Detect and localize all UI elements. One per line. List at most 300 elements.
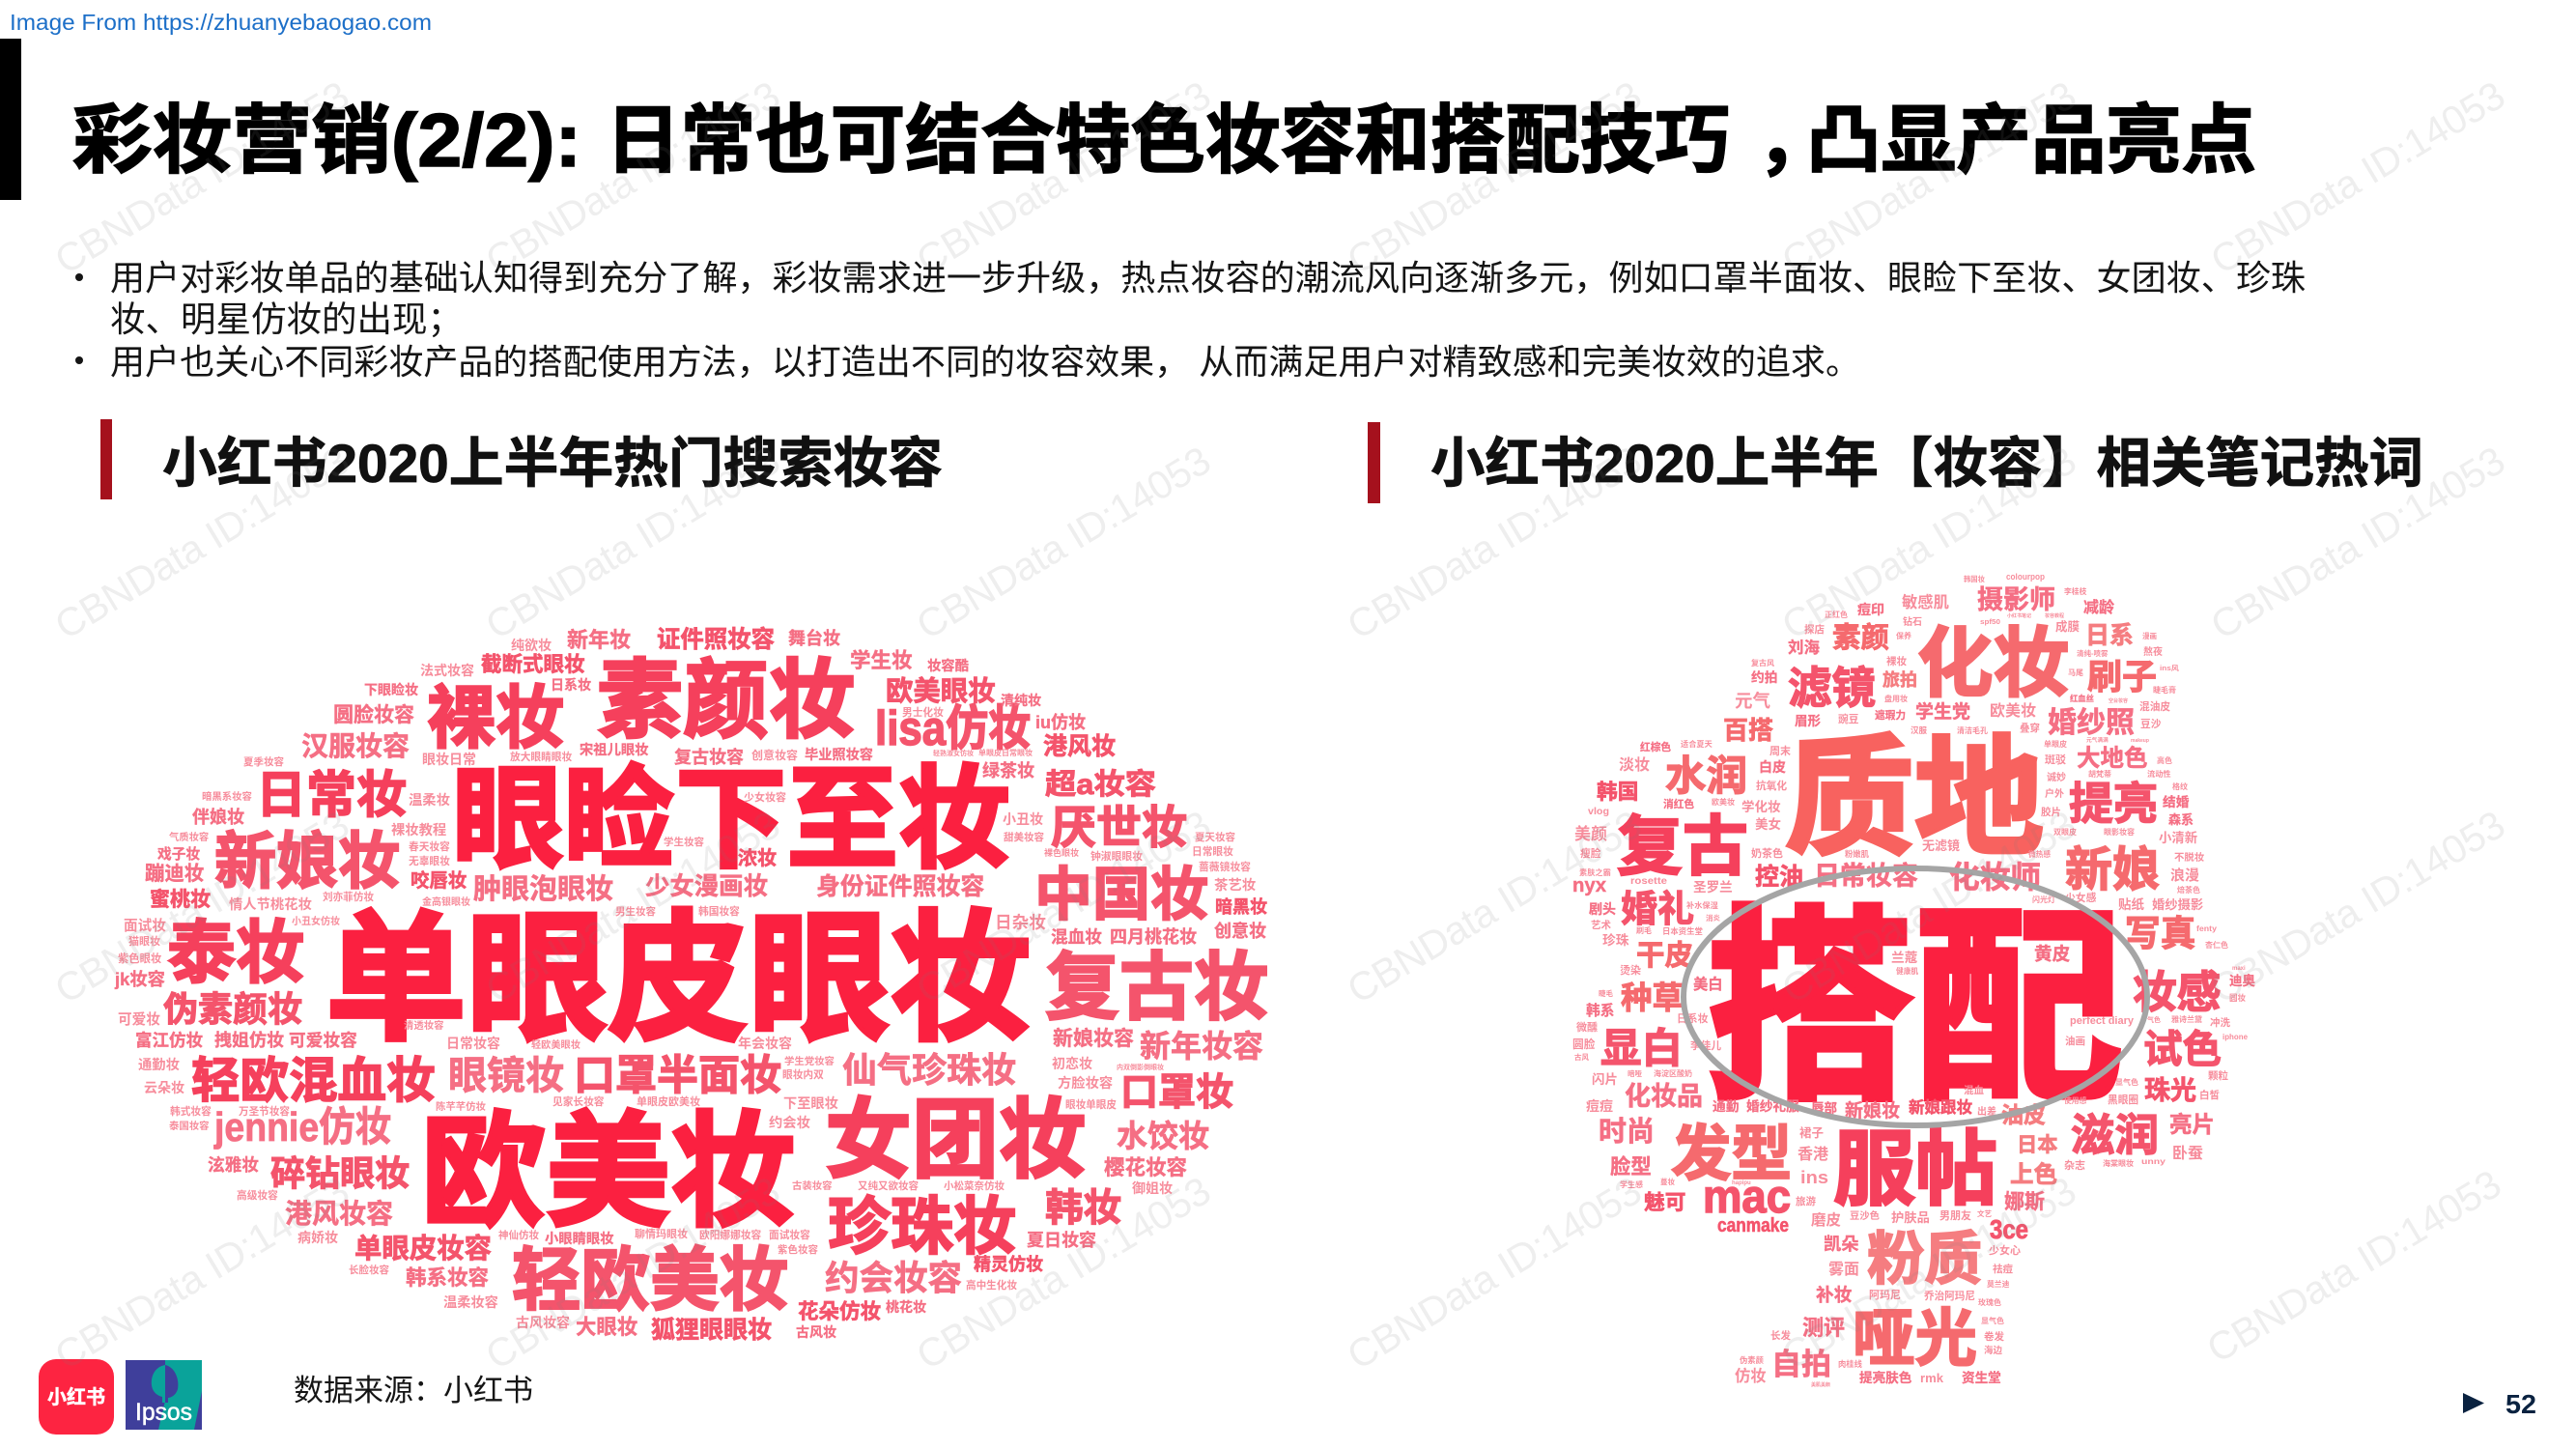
word cloud: makeup related note keywords: 欧美妆	[1990, 701, 2036, 720]
word cloud: hot searched makeup: 富江仿妆	[135, 1031, 203, 1050]
word cloud: hot searched makeup: 男士化妆	[902, 706, 944, 719]
word cloud: makeup related note keywords: 混油皮	[2139, 700, 2170, 713]
data source note: 数据来源：小红书	[294, 1374, 533, 1407]
word cloud: makeup related note keywords: 文艺	[1977, 1208, 1992, 1218]
word cloud: hot searched makeup: 蹦迪妆	[145, 863, 204, 885]
word cloud: makeup related note keywords: 魅可	[1644, 1190, 1685, 1214]
word cloud: makeup related note keywords: 圣罗兰	[1693, 879, 1733, 895]
word cloud: makeup related note keywords: vlog	[1588, 807, 1609, 817]
word cloud: hot searched makeup: 绿茶妆	[982, 760, 1034, 781]
word cloud: makeup related note keywords: 黑眼圈	[2108, 1094, 2138, 1106]
word cloud: hot searched makeup: 新年妆容	[1140, 1029, 1263, 1064]
word cloud: hot searched makeup: 韩系妆容	[406, 1265, 489, 1290]
word cloud: hot searched makeup: 轻欧美眼妆	[531, 1038, 580, 1051]
word cloud: hot searched makeup: 古风妆容	[516, 1315, 570, 1330]
word cloud: hot searched makeup: 轻熟淑女仿妆	[933, 749, 974, 757]
watermarks: CBNData ID:14053	[1340, 72, 1649, 283]
watermarks: CBNData ID:14053	[1774, 1168, 2083, 1378]
word cloud: makeup related note keywords: 海边	[1984, 1345, 2003, 1356]
word cloud: hot searched makeup: 水饺妆	[1117, 1119, 1209, 1153]
word cloud: hot searched makeup: 无辜眼妆	[409, 855, 450, 867]
word cloud: makeup related note keywords: 圆妆	[2229, 993, 2247, 1003]
word cloud: hot searched makeup: 肿眼泡眼妆	[473, 873, 613, 905]
word cloud: makeup related note keywords: 莫兰迪	[1987, 1279, 2010, 1289]
word cloud: makeup related note keywords: 清洁毛孔	[1957, 725, 1988, 735]
word cloud: makeup related note keywords: 新娘跟妆	[1909, 1097, 1972, 1117]
bullet text block: 用户也关心不同彩妆产品的搭配使用方法，以打造出不同的妆容效果， 从而满足用户对精致感和完美妆效的追求。	[110, 342, 1860, 382]
word cloud: hot searched makeup: 温柔妆容	[443, 1294, 498, 1311]
word cloud: hot searched makeup: 万圣节妆容	[239, 1105, 290, 1118]
word cloud: makeup related note keywords: 伪素颜	[1740, 1355, 1765, 1365]
word cloud: makeup related note keywords: 抗氧化	[1756, 780, 1787, 792]
word cloud: hot searched makeup: 春天妆容	[409, 840, 450, 853]
word cloud: makeup related note keywords: 气色	[2147, 1015, 2161, 1024]
word cloud: makeup related note keywords: 艺术	[1591, 919, 1611, 931]
word cloud: hot searched makeup: 面试妆容	[769, 1229, 810, 1241]
word cloud: hot searched makeup: 四月桃花妆	[1110, 926, 1197, 947]
word cloud: makeup related note keywords: 乔治阿玛尼	[1924, 1290, 1975, 1302]
word cloud: makeup related note keywords: 显气色	[2115, 1077, 2138, 1087]
left heading	[100, 419, 943, 499]
word cloud: makeup related note keywords: 漫画	[2142, 631, 2158, 640]
watermarks: CBNData ID:14053	[909, 802, 1218, 1012]
word cloud: makeup related note keywords: 显气色	[1981, 1316, 2004, 1325]
word cloud: hot searched makeup: 蜜桃妆	[150, 889, 211, 911]
word cloud: makeup related note keywords: 烫染	[1620, 963, 1641, 977]
word cloud: makeup related note keywords: 卷发	[1984, 1330, 2005, 1343]
word cloud: makeup related note keywords: 上色	[2010, 1161, 2057, 1188]
second word: 眼睑下至妆	[452, 757, 1010, 882]
word cloud: makeup related note keywords: 哑光	[1853, 1304, 1977, 1374]
word cloud: hot searched makeup: 精灵仿妆	[974, 1254, 1043, 1274]
word cloud: makeup related note keywords: 护肤品	[1891, 1209, 1930, 1225]
word cloud: makeup related note keywords: 格纹	[2172, 781, 2188, 791]
word cloud: hot searched makeup: 夏日妆容	[1027, 1230, 1096, 1250]
word cloud: makeup related note keywords: canmake	[1717, 1215, 1789, 1236]
word cloud: makeup related note keywords: 娜斯	[2004, 1191, 2045, 1213]
word cloud: makeup related note keywords: 混血	[1964, 1084, 1984, 1096]
word cloud: hot searched makeup: 气质妆容	[169, 831, 209, 843]
word cloud: hot searched makeup: 病娇妆	[297, 1230, 338, 1245]
logo: xiaohongshu	[39, 1359, 114, 1435]
word cloud: makeup related note keywords: 化妆品	[1625, 1082, 1703, 1111]
word cloud: makeup related note keywords: 豆沙色	[1850, 1209, 1880, 1222]
watermarks: CBNData ID:14053	[909, 1168, 1218, 1378]
word cloud: makeup related note keywords: 提亮肤色	[1859, 1370, 1912, 1385]
word cloud: makeup related note keywords: 流动性	[2147, 769, 2171, 779]
word cloud: makeup related note keywords: 使用感	[2064, 1095, 2087, 1105]
word cloud: makeup related note keywords: 胶片	[2041, 806, 2061, 818]
word cloud: hot searched makeup: 神仙仿妆	[498, 1229, 539, 1241]
word cloud: makeup related note keywords: mac	[1703, 1172, 1791, 1223]
word cloud: makeup related note keywords: 睫毛	[1599, 988, 1613, 998]
word cloud: makeup related note keywords: 复古	[1617, 810, 1748, 884]
word cloud: makeup related note keywords: 正红色	[1825, 610, 1848, 619]
word cloud: makeup related note keywords: 马尾	[2068, 668, 2083, 677]
word cloud: makeup related note keywords: 仿妆	[1735, 1367, 1767, 1385]
word cloud: makeup related note keywords: 发型	[1671, 1121, 1792, 1188]
word cloud: hot searched makeup: 温柔妆	[409, 791, 450, 809]
word cloud: makeup related note keywords: 日系	[2085, 622, 2134, 649]
word cloud: hot searched makeup: 眼妆内双	[782, 1068, 824, 1081]
word cloud: hot searched makeup: 法式妆容	[420, 663, 474, 678]
word cloud: makeup related note keywords: 刘海	[1788, 639, 1820, 657]
title	[72, 98, 2256, 183]
word cloud: hot searched makeup: 约会妆	[769, 1114, 810, 1131]
word cloud: hot searched makeup: 刘亦菲仿妆	[323, 891, 374, 903]
word cloud: hot searched makeup: 日杂妆	[995, 913, 1046, 932]
word cloud: hot searched makeup: 证件照妆容	[657, 627, 775, 653]
word cloud: makeup related note keywords: 裸妆	[1886, 655, 1907, 668]
word cloud: hot searched makeup: 小松菜奈仿妆	[944, 1179, 1005, 1192]
word cloud: makeup related note keywords: 瘦脸	[1580, 847, 1601, 860]
word cloud: makeup related note keywords: 刷子	[2087, 657, 2157, 696]
word cloud: hot searched makeup: 裸色眼妆	[1044, 847, 1079, 858]
word cloud: hot searched makeup: 咬唇妆	[410, 869, 467, 892]
word cloud: hot searched makeup: 欧美眼妆	[886, 676, 996, 707]
word cloud: makeup related note keywords: 成膜	[2055, 619, 2081, 634]
watermarks: CBNData ID:14053	[1774, 802, 2083, 1012]
word cloud: makeup related note keywords: 珠光	[2144, 1076, 2196, 1105]
watermarks: CBNData ID:14053	[2203, 802, 2512, 1012]
word cloud: makeup related note keywords: 滤镜	[1788, 664, 1876, 713]
word cloud: makeup related note keywords: 韩系	[1586, 1002, 1614, 1019]
word cloud: makeup related note keywords: 日本	[2017, 1133, 2058, 1156]
word cloud: makeup related note keywords: 李桂枝	[2064, 586, 2087, 596]
word cloud: hot searched makeup: 日常妆容	[446, 1036, 500, 1051]
word cloud: makeup related note keywords: 暗哑	[1628, 1068, 1642, 1078]
word cloud: hot searched makeup: 可爱妆容	[289, 1030, 357, 1050]
word cloud: makeup related note keywords: 豆沙	[2140, 719, 2162, 730]
word cloud: makeup related note keywords: unny	[2141, 1157, 2166, 1166]
title: 彩妆营销(2/2):	[72, 98, 581, 183]
word cloud: makeup related note keywords: 痘印	[1857, 602, 1884, 617]
word cloud: hot searched makeup: 裸妆教程	[391, 821, 446, 838]
word cloud: hot searched makeup: 中国妆	[1034, 863, 1208, 927]
word cloud: makeup related note keywords: 日本资生堂	[1662, 926, 1703, 936]
word cloud: hot searched makeup: 纯欲妆	[511, 638, 552, 653]
word cloud: makeup related note keywords: 不脱妆	[2174, 851, 2205, 864]
word cloud: makeup related note keywords: spf50	[1980, 619, 2000, 626]
word cloud: hot searched makeup: 清透妆容	[404, 1019, 444, 1032]
word cloud: makeup related note keywords: 韩国妆	[1964, 575, 1986, 583]
word cloud: makeup related note keywords: 婚纱照	[2048, 707, 2135, 739]
word cloud: makeup related note keywords: 滋润	[2071, 1111, 2159, 1160]
word cloud: makeup related note keywords: 测评	[1802, 1316, 1845, 1340]
word cloud: makeup related note keywords: 补水保湿	[1686, 900, 1718, 910]
word cloud: makeup related note keywords: 婚礼	[1621, 890, 1694, 930]
word cloud: makeup related note keywords: 凯朵	[1824, 1234, 1859, 1254]
word cloud: hot searched makeup: 港风妆容	[285, 1199, 393, 1229]
word cloud: hot searched makeup: 单眼皮日常眼妆	[978, 748, 1033, 757]
left heading: 小红书2020上半年热门搜索妆容	[162, 433, 943, 494]
word cloud: makeup related note keywords: 消红色	[1663, 798, 1694, 810]
word cloud: hot searched makeup: 古风妆	[796, 1324, 836, 1340]
word cloud: makeup related note keywords: 百搭	[1723, 716, 1773, 745]
word cloud: hot searched makeup: iu仿妆	[1035, 712, 1086, 732]
watermarks: CBNData ID:14053	[478, 438, 787, 648]
word cloud: hot searched makeup: 截断式眼妆	[481, 653, 585, 676]
word cloud: hot searched makeup: lisa仿妆	[875, 701, 1031, 755]
word cloud: hot searched makeup: 蔷薇镜妆容	[1199, 860, 1251, 873]
word cloud: makeup related note keywords: 学生感	[1620, 1179, 1643, 1189]
word cloud: hot searched makeup: 欧阳娜娜妆容	[699, 1229, 761, 1241]
word cloud: makeup related note keywords: 通勤	[1713, 1098, 1740, 1114]
word cloud: makeup related note keywords: colourpop	[2006, 572, 2045, 582]
word cloud: hot searched makeup: 大眼妆	[576, 1316, 637, 1339]
word cloud: makeup related note keywords: 胡梵蒂	[2088, 769, 2111, 779]
page number	[2463, 1389, 2536, 1419]
word cloud: makeup related note keywords: 卧蚕	[2172, 1145, 2203, 1162]
word cloud: hot searched makeup: 甜美妆容	[1004, 831, 1044, 843]
word cloud: makeup related note keywords: 日系妆	[1677, 1011, 1709, 1025]
word cloud: makeup related note keywords: maxi	[2232, 966, 2246, 972]
word cloud: hot searched makeup: 浓妆	[738, 847, 777, 869]
word cloud: hot searched makeup: 汉服妆容	[301, 731, 410, 761]
word cloud: makeup related note keywords: 祛痘	[1993, 1263, 2013, 1275]
word cloud: hot searched makeup: 泰妆	[167, 916, 304, 992]
word cloud: hot searched makeup: 金高银眼妆	[422, 895, 470, 908]
word cloud: makeup related note keywords: 斑驳	[2045, 753, 2066, 766]
word cloud: makeup related note keywords: 水润	[1665, 754, 1747, 800]
word cloud: makeup related note keywords: 海棠眼妆	[2103, 1158, 2134, 1168]
word cloud: makeup related note keywords: 旅游	[1796, 1195, 1816, 1208]
word cloud: hot searched makeup: 单眼皮欧美妆	[637, 1094, 700, 1108]
word cloud: hot searched makeup: 创意妆	[1214, 921, 1266, 941]
watermarks: CBNData ID:14053	[1774, 72, 2083, 283]
word cloud: makeup related note keywords: 油画	[2065, 1035, 2085, 1047]
word cloud: makeup related note keywords: 脸型	[1610, 1154, 1652, 1179]
word cloud: hot searched makeup: 聊情玛眼妆	[635, 1227, 688, 1240]
page number: 52	[2505, 1389, 2536, 1419]
word cloud: makeup related note keywords: 补妆	[1816, 1285, 1853, 1305]
watermarks: CBNData ID:14053	[1340, 438, 1649, 648]
word cloud: hot searched makeup: 妆容酷	[927, 657, 969, 674]
word cloud: makeup related note keywords: 奶茶色	[1751, 846, 1783, 860]
word cloud: makeup related note keywords: 无滤镜	[1922, 838, 1960, 853]
word cloud: hot searched makeup: 内双倒影倒眼妆	[1117, 1063, 1164, 1071]
word cloud: makeup related note keywords: 雾面	[1828, 1261, 1859, 1278]
word cloud: makeup related note keywords: 美肌美颜	[1811, 1381, 1830, 1388]
word cloud: makeup related note keywords: 小红书笔记	[2007, 612, 2031, 619]
word cloud: makeup related note keywords: 油皮	[2001, 1102, 2046, 1127]
word cloud: hot searched makeup: 夏天妆容	[1195, 831, 1235, 843]
word cloud: hot searched makeup: 日系妆	[551, 677, 591, 693]
word cloud: makeup related note keywords: 素肤之霸	[1579, 867, 1611, 877]
word cloud: makeup related note keywords: 豌豆	[1838, 713, 1859, 725]
word cloud: makeup related note keywords: 欧美妆	[1712, 797, 1735, 807]
word cloud: makeup related note keywords: 新娘	[2065, 844, 2160, 896]
word cloud: makeup related note keywords: 冲洗	[2210, 1016, 2231, 1029]
word cloud: hot searched makeup: 珍珠妆	[828, 1191, 1016, 1262]
word cloud: hot searched makeup: 暗黑妆	[1215, 896, 1267, 917]
word cloud: makeup related note keywords: 淡妆	[1619, 755, 1650, 774]
word cloud: hot searched makeup: 眼妆单眼皮	[1065, 1098, 1117, 1111]
word cloud: hot searched makeup: 口罩半面妆	[574, 1053, 781, 1099]
word cloud: makeup related note keywords: 元气	[1735, 691, 1770, 711]
word cloud: makeup related note keywords: 试色	[2143, 1027, 2222, 1071]
word cloud: hot searched makeup: 单眼皮妆容	[354, 1234, 492, 1264]
title: 凸显产品亮点	[1806, 98, 2256, 183]
word cloud: hot searched makeup: 初恋妆	[1052, 1056, 1092, 1071]
word cloud: hot searched makeup: 古装妆容	[792, 1179, 833, 1192]
word cloud: makeup related note keywords: 红血丝	[2070, 694, 2094, 703]
word cloud: hot searched makeup: 泫雅妆	[208, 1155, 259, 1175]
word cloud: hot searched makeup: 小丑女仿妆	[292, 915, 340, 927]
word cloud: makeup related note keywords: 结婚	[2163, 794, 2190, 810]
word cloud: makeup related note keywords: 森系	[2168, 812, 2194, 827]
word cloud: makeup related note keywords: 焙茶色	[2177, 885, 2200, 895]
word cloud: hot searched makeup: 伴娘妆	[192, 807, 244, 827]
word cloud: makeup related note keywords: 高色	[2157, 755, 2172, 765]
word cloud: hot searched makeup: jk妆容	[114, 969, 165, 989]
source link text: Image From https://zhuanyebaogao.com	[10, 10, 432, 35]
word cloud: hot searched makeup: 女团妆	[825, 1093, 1086, 1189]
word cloud: hot searched makeup: 宋祖儿眼妆	[580, 741, 648, 758]
word cloud: hot searched makeup: 素颜妆	[597, 652, 855, 749]
word cloud: hot searched makeup: 戏子妆	[157, 845, 200, 863]
watermarks: CBNData ID:14053	[47, 802, 356, 1012]
logo: xiaohongshu: 小红书	[47, 1386, 105, 1408]
word cloud: hot searched makeup: 狐狸眼眼妆	[651, 1317, 772, 1344]
word cloud: makeup related note keywords: 美颜	[1574, 824, 1607, 843]
word cloud: makeup related note keywords: 复古风	[1751, 658, 1774, 668]
word cloud: makeup related note keywords: 黄皮	[2034, 944, 2071, 964]
word cloud: makeup related note keywords: 妆感	[2133, 968, 2221, 1017]
largest word: 单眼皮眼妆	[326, 900, 1031, 1058]
word cloud: hot searched makeup: 花朵仿妆	[798, 1300, 881, 1323]
word cloud: makeup related note keywords: 贴纸	[2118, 896, 2144, 912]
word cloud: makeup related note keywords: 海淀区酸奶	[1654, 1068, 1692, 1078]
word cloud: makeup related note keywords: 阿玛尼	[1869, 1289, 1901, 1301]
word cloud: hot searched makeup: 茶艺妆	[1214, 876, 1256, 894]
word cloud: makeup related note keywords: 剧头	[1589, 901, 1616, 917]
word cloud: hot searched makeup: 新娘妆	[214, 827, 400, 896]
word cloud: makeup related note keywords: 少女感	[2065, 891, 2097, 904]
word cloud: hot searched makeup: 韩国妆容	[698, 905, 740, 918]
word cloud: makeup related note keywords: 珍珠	[1602, 932, 1629, 948]
word cloud: makeup related note keywords: nyx	[1572, 875, 1606, 896]
word cloud: hot searched makeup: 小眼睛眼妆	[545, 1230, 613, 1247]
word cloud: hot searched makeup: 身份证件照妆容	[816, 872, 984, 900]
word cloud: hot searched makeup: 男生妆容	[615, 905, 656, 918]
word cloud: makeup related note keywords: 痘痘	[1586, 1098, 1613, 1114]
word cloud: hot searched makeup: 猫眼妆	[128, 934, 160, 948]
word cloud: hot searched makeup: 伪素颜妆	[163, 989, 302, 1029]
title: ，	[1756, 98, 1831, 183]
word cloud: hot searched makeup: 通勤妆	[138, 1056, 180, 1073]
word cloud: makeup related note keywords: 学生党	[1915, 700, 1970, 723]
word cloud: hot searched makeup: 创意妆容	[751, 748, 798, 762]
watermarks: CBNData ID:14053	[47, 438, 356, 648]
word cloud: makeup related note keywords: 唇部	[1811, 1100, 1837, 1116]
word cloud: makeup related note keywords: 古风	[1574, 1052, 1590, 1062]
word cloud: hot searched makeup: 下眼睑妆	[364, 682, 418, 697]
word cloud: makeup related note keywords: 小清新	[2159, 830, 2197, 845]
word cloud: hot searched makeup: 钟淑眼眼妆	[1090, 849, 1143, 863]
word cloud: makeup related note keywords: 磨皮	[1811, 1211, 1842, 1229]
word cloud: makeup related note keywords: 李佳儿	[1690, 1039, 1721, 1052]
word cloud: makeup related note keywords: 3ce	[1990, 1214, 2028, 1244]
word cloud: hot searched makeup: 年会妆容	[738, 1036, 792, 1051]
word cloud: hot searched makeup: 夏季妆容	[243, 755, 284, 768]
word cloud: makeup related note keywords: 旅拍	[1882, 670, 1917, 690]
word cloud: makeup related note keywords: 元气满满	[2086, 736, 2109, 744]
word cloud: hot searched makeup: 泰国妆容	[169, 1120, 210, 1132]
watermarks: CBNData ID:14053	[1340, 1168, 1649, 1378]
word cloud: hot searched makeup: jennie仿妆	[213, 1104, 391, 1150]
word cloud: makeup related note keywords: 亮片	[2169, 1111, 2215, 1137]
word cloud: hot searched makeup: 紫色眼妆	[118, 952, 161, 965]
word cloud: hot searched makeup: 见家长妆容	[552, 1095, 605, 1108]
word cloud: makeup related note keywords: 写真	[2125, 914, 2195, 953]
watermarks: CBNData ID:14053	[478, 802, 787, 1012]
word cloud: makeup related note keywords: 熬夜	[2143, 645, 2163, 658]
word cloud: hot searched makeup: 暗黑系妆容	[202, 790, 253, 803]
word cloud: hot searched makeup: 高中生化妆	[966, 1279, 1017, 1292]
word cloud: makeup related note keywords: 显白	[1600, 1027, 1683, 1072]
word cloud: hot searched makeup: 桃花妆	[886, 1299, 926, 1315]
word cloud: hot searched makeup: 韩妆	[1045, 1187, 1121, 1230]
word cloud: makeup related note keywords: perfect diary	[2070, 1015, 2135, 1027]
bullet text block: 用户对彩妆单品的基础认知得到充分了解，彩妆需求进一步升级，热点妆容的潮流风向逐渐多元，例如口罩半面妆、眼睑下至妆、女团妆、珍珠	[110, 258, 2306, 298]
word cloud: hot searched makeup: 云朵妆	[144, 1080, 184, 1095]
word cloud: hot searched makeup: 复古妆容	[674, 747, 744, 767]
word cloud: makeup related note keywords: 汉服	[1911, 725, 1928, 735]
word cloud: makeup related note keywords: 化妆	[1917, 621, 2069, 706]
word cloud: makeup related note keywords: 玫瑰色	[1978, 1297, 2001, 1307]
logo: ipsos: Ipsos	[135, 1399, 192, 1426]
word cloud: makeup related note keywords: 出差	[1977, 1105, 1996, 1118]
word cloud: makeup related note keywords: 盘用妆	[1884, 694, 1908, 703]
word cloud: makeup related note keywords: hapipu	[1732, 1180, 1751, 1186]
word cloud: makeup related note keywords: 学化妆	[1741, 799, 1781, 814]
word cloud: makeup related note keywords: 保养	[1896, 631, 1911, 640]
word cloud: makeup related note keywords: ins风	[2160, 665, 2179, 672]
word cloud: makeup related note keywords: 雅诗兰黛	[2171, 1014, 2202, 1024]
word cloud: hot searched makeup: 少女妆容	[744, 790, 786, 804]
word cloud: hot searched makeup: 御姐妆	[1132, 1180, 1173, 1196]
word cloud: makeup related note keywords: 粉质	[1867, 1227, 1982, 1292]
word cloud: makeup related note keywords: 白皙	[2199, 1089, 2220, 1101]
word cloud: makeup related note keywords: 韩国	[1597, 780, 1638, 804]
word cloud: makeup related note keywords: 清纯-喷雾	[2077, 648, 2109, 658]
word cloud: hot searched makeup: 放大眼睛眼妆	[510, 751, 572, 763]
word cloud: makeup related note keywords: rmk	[1920, 1371, 1944, 1385]
word cloud: hot searched makeup: 日常妆	[256, 768, 407, 824]
word cloud: hot searched makeup: 清纯妆	[1001, 693, 1041, 708]
word cloud: hot searched makeup: 圆脸妆容	[333, 703, 414, 726]
word cloud: makeup related note keywords: 自拍	[1771, 1348, 1831, 1381]
word cloud: makeup related note keywords: 敏感肌	[1902, 593, 1949, 611]
word cloud: makeup related note keywords: 眉形	[1795, 714, 1822, 728]
title accent bar	[0, 39, 21, 200]
bullet text block: 妆、明星仿妆的出现；	[110, 299, 463, 339]
word cloud: makeup related note keywords: 闪片	[1592, 1071, 1618, 1087]
word cloud: makeup related note keywords: 摄影师	[1977, 585, 2055, 614]
word cloud: makeup related note keywords: 红棕色	[1640, 741, 1671, 753]
word cloud: makeup related note keywords: rosette	[1630, 876, 1667, 887]
word cloud: hot searched makeup: 樱花妆容	[1104, 1155, 1187, 1179]
word cloud: hot searched makeup: 学生妆	[850, 649, 913, 672]
word cloud: hot searched makeup: 小丑妆	[1003, 811, 1043, 827]
word cloud: makeup related note keywords: 微醺	[1576, 1020, 1598, 1034]
word cloud: hot searched makeup: 仙气珍珠妆	[842, 1050, 1016, 1090]
word cloud: makeup related note keywords: 白皮	[1759, 759, 1786, 775]
word cloud: makeup related note keywords: 杏仁色	[2205, 940, 2228, 950]
highlight ellipse around 搭配	[1684, 868, 2147, 1125]
word cloud: makeup related note keywords: 蔓妆	[1660, 1177, 1675, 1186]
